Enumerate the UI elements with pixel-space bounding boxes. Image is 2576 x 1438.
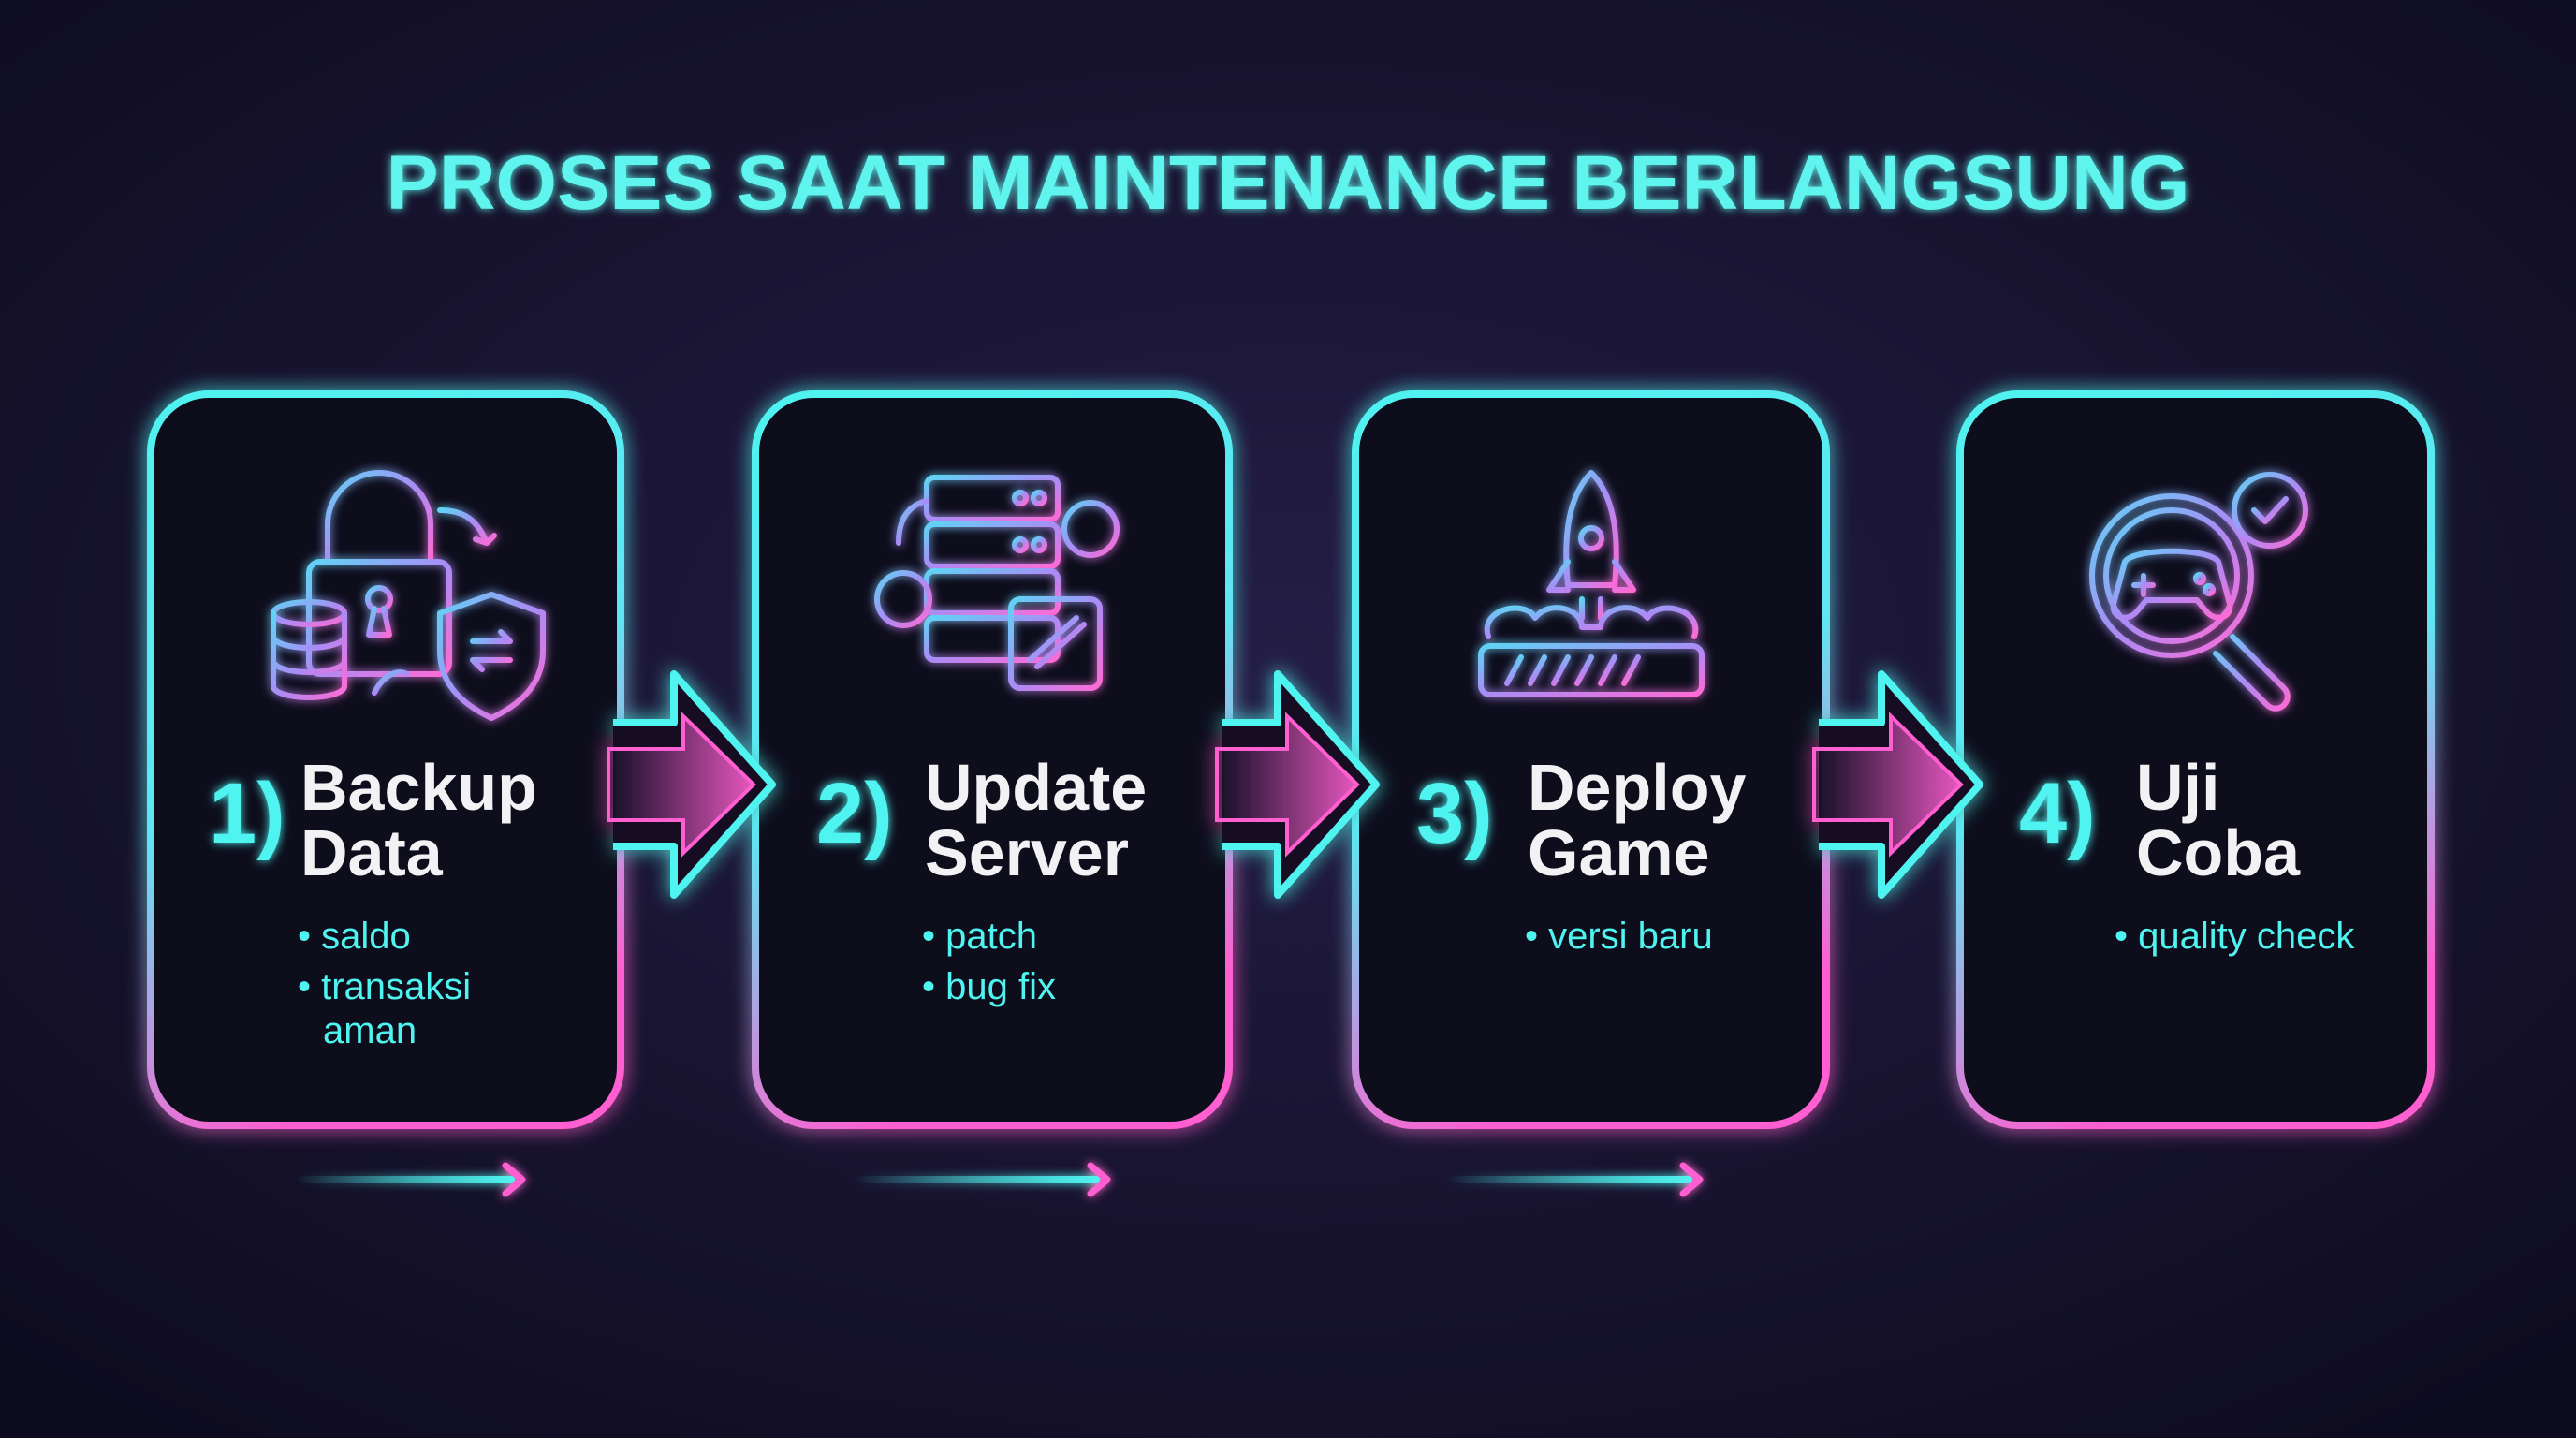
bullets 2 bbox=[922, 916, 1056, 1007]
card 2: Server bbox=[925, 816, 1129, 889]
heading 2: 2) bbox=[816, 766, 893, 861]
bullets 3: • versi baru bbox=[1525, 916, 1713, 957]
card 3: Deploy bbox=[1528, 751, 1746, 824]
card 2 bbox=[755, 394, 1229, 1125]
card 1: Backup bbox=[300, 751, 537, 824]
bullets 1 bbox=[298, 916, 471, 1051]
bullets 2: • bug fix bbox=[922, 966, 1056, 1007]
card 3 bbox=[1355, 394, 1826, 1125]
title: PROSES SAAT MAINTENANCE BERLANGSUNG bbox=[386, 140, 2190, 226]
card 4 bbox=[1960, 394, 2431, 1125]
icon: rocket launch bbox=[1481, 473, 1702, 695]
card 3: Game bbox=[1528, 816, 1710, 889]
arrow 3 bbox=[1814, 674, 1980, 895]
card 4: Coba bbox=[2136, 816, 2301, 889]
bullets 4: • quality check bbox=[2115, 916, 2355, 957]
bullets 2: • patch bbox=[922, 916, 1037, 957]
heading 4: 4) bbox=[2019, 766, 2096, 861]
card 4: Uji bbox=[2136, 751, 2219, 824]
arrow 1 bbox=[608, 674, 772, 895]
card 1: Data bbox=[300, 816, 444, 889]
arrow 2 bbox=[1217, 674, 1376, 895]
bottom progress arrows bbox=[296, 1166, 1700, 1194]
card 1 bbox=[151, 394, 621, 1125]
heading 1: 1) bbox=[209, 766, 285, 861]
bullets 1: • saldo bbox=[298, 916, 411, 957]
icon: server patch bbox=[877, 477, 1117, 688]
icon: lock database shield bbox=[273, 473, 543, 718]
icon: magnifier gamepad check bbox=[2092, 475, 2305, 709]
bullets 1: aman bbox=[323, 1010, 417, 1051]
heading 3: 3) bbox=[1416, 766, 1493, 861]
bullets 1: • transaksi bbox=[298, 966, 471, 1007]
card 2: Update bbox=[925, 751, 1147, 824]
